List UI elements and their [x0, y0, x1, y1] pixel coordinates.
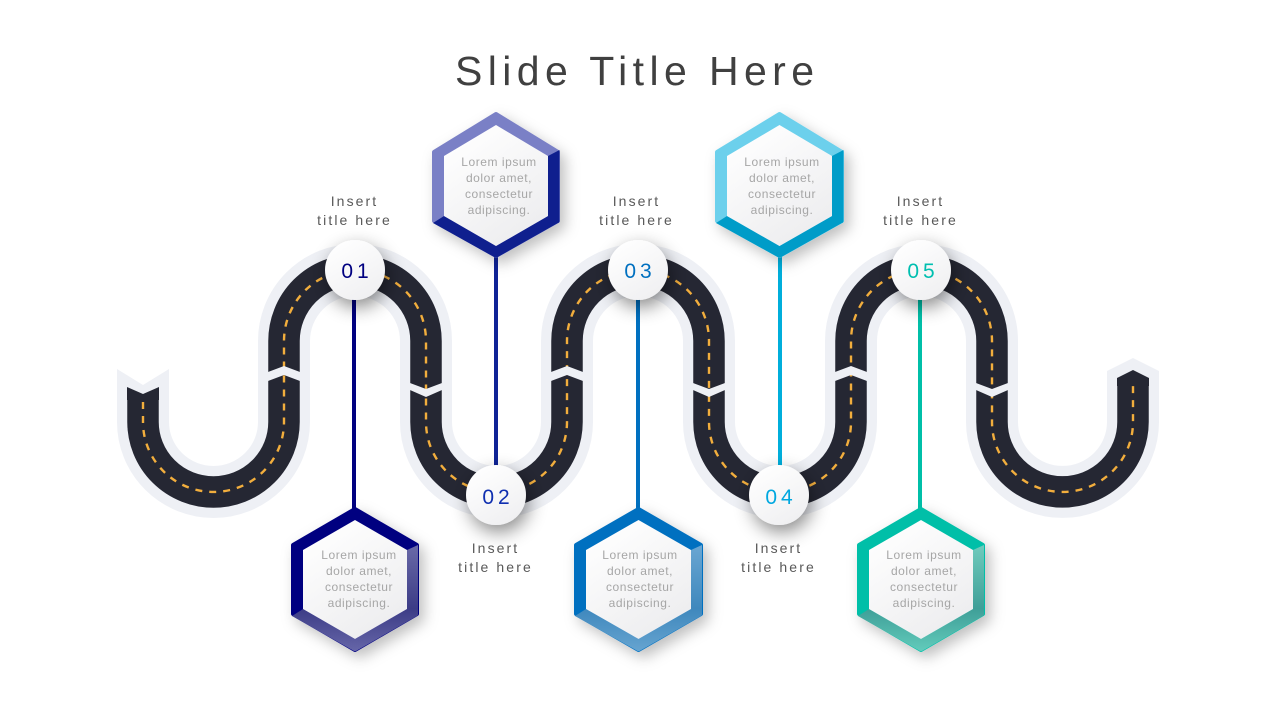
- label 04: Insert: [755, 540, 802, 556]
- road joints: [268, 366, 1008, 397]
- marker 03: [608, 240, 668, 300]
- hexagon 05: dolor amet,: [891, 564, 957, 578]
- hexagon 04: consectetur: [748, 187, 816, 201]
- title: Slide Title Here: [455, 48, 819, 94]
- hexagon 05: Lorem ipsum: [886, 548, 962, 562]
- hexagon 02: consectetur: [465, 187, 533, 201]
- hexagon 04: dolor amet,: [749, 171, 815, 185]
- label 03: title here: [599, 212, 674, 228]
- marker 03: 03: [624, 260, 656, 283]
- connector lines: [354, 250, 920, 512]
- label 01: Insert: [331, 193, 378, 209]
- label 02: Insert: [472, 540, 519, 556]
- hexagon 04: adipiscing.: [751, 203, 813, 217]
- hexagon 01: Lorem ipsum: [321, 548, 397, 562]
- label 01: title here: [317, 212, 392, 228]
- hexagon 04: Lorem ipsum: [744, 155, 820, 169]
- hexagon 02: adipiscing.: [468, 203, 530, 217]
- road surface: [127, 270, 1149, 492]
- hexagon 03: dolor amet,: [607, 564, 673, 578]
- road halo: [117, 270, 1159, 492]
- marker 04: [749, 465, 809, 525]
- hexagon 02: [433, 114, 560, 258]
- marker 01: 01: [341, 260, 373, 283]
- hexagon 02: Lorem ipsum: [461, 155, 537, 169]
- hexagon 03: [575, 509, 702, 651]
- hexagon 05: adipiscing.: [893, 596, 955, 610]
- hexagon 04: [716, 114, 844, 258]
- road centre dashes: [143, 270, 1133, 492]
- label 04: title here: [741, 559, 816, 575]
- marker 05: [891, 240, 951, 300]
- hexagon 01: consectetur: [325, 580, 393, 594]
- label 05: title here: [883, 212, 958, 228]
- label 05: Insert: [897, 193, 944, 209]
- marker 05: 05: [907, 260, 939, 283]
- marker 04: 04: [765, 486, 797, 509]
- hexagon 01: adipiscing.: [328, 596, 390, 610]
- marker 02: [466, 465, 526, 525]
- hexagon 05: [858, 509, 984, 651]
- hexagon 03: adipiscing.: [609, 596, 671, 610]
- winding road: [117, 270, 1159, 492]
- marker 02: 02: [482, 486, 514, 509]
- label 02: title here: [458, 559, 533, 575]
- hexagon 01: [292, 509, 418, 651]
- hexagon 02: dolor amet,: [466, 171, 532, 185]
- marker 01: [325, 240, 385, 300]
- hexagon 03: consectetur: [606, 580, 674, 594]
- hexagon 05: consectetur: [890, 580, 958, 594]
- label 03: Insert: [613, 193, 660, 209]
- hexagon 03: Lorem ipsum: [602, 548, 678, 562]
- hexagon 01: dolor amet,: [326, 564, 392, 578]
